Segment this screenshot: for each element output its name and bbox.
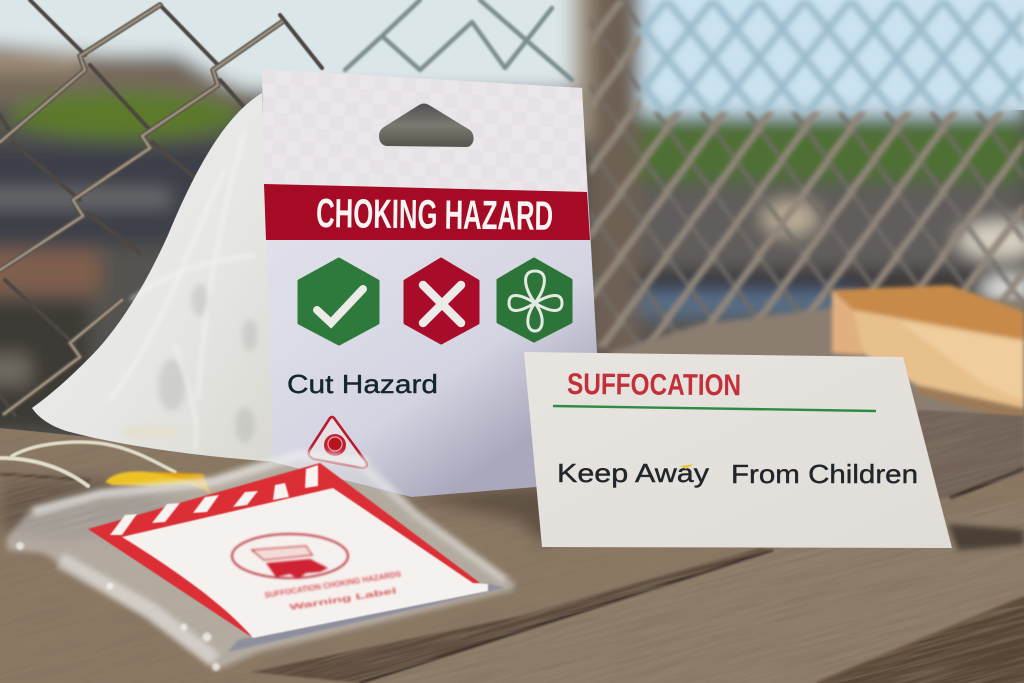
wood grain — [388, 505, 511, 628]
icon: warning triangle — [309, 417, 367, 468]
text: keep away from children — [557, 458, 918, 489]
heading: suffocation: SUFFOCATION — [567, 368, 741, 402]
text: keep away from children: Keep Away — [557, 458, 709, 488]
far table edge, right side — [610, 300, 1024, 440]
yellow ribbon — [105, 471, 211, 494]
label: cut hazard: Cut Hazard — [287, 369, 438, 399]
icon: green check hexagon — [299, 259, 378, 344]
icon: green flower hexagon — [498, 259, 571, 341]
plastic bag behind card — [32, 93, 278, 462]
red banner — [264, 184, 590, 240]
cord — [0, 442, 175, 486]
leaflet red border — [88, 463, 480, 636]
green rule — [553, 406, 876, 411]
leaflet white area — [122, 488, 488, 638]
clear bag — [7, 450, 515, 670]
left chain-link fence — [0, 0, 572, 415]
hang hole — [379, 104, 474, 147]
shadow on table from cards — [400, 482, 1024, 550]
text: keep away from children: From Children — [731, 459, 918, 489]
wooden table — [0, 410, 1024, 683]
hazard stripes — [110, 465, 318, 535]
card: suffocation — [524, 352, 952, 548]
small plastic bag with leaflet — [7, 450, 515, 671]
right chain-link fence, out of focus — [590, 0, 1024, 347]
patterned card header — [262, 69, 587, 192]
leaflet small print: Warning Label — [289, 586, 397, 612]
plank bevel and gaps — [0, 469, 1024, 683]
icon: red cross hexagon — [405, 259, 478, 343]
leaflet icon: circle with cart — [232, 534, 348, 579]
bag glints — [16, 542, 220, 671]
card: choking hazard — [262, 69, 597, 497]
leaflet back layer — [228, 584, 505, 652]
cardboard tray — [832, 285, 1024, 424]
leaflet small print: SUFFOCATION CHOKING HAZARDS — [264, 569, 402, 600]
heading: choking hazard: CHOKING HAZARD — [316, 190, 553, 239]
